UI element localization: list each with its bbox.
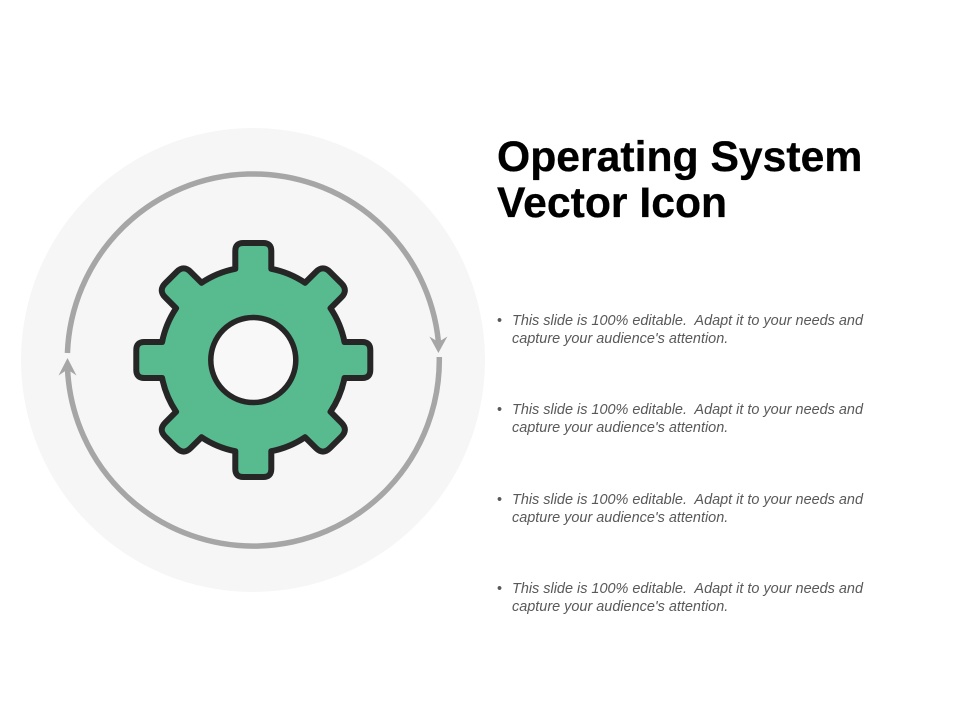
bullet text 2: This slide is 100% editable. Adapt it to your needs and capture your audience's attention.	[512, 402, 863, 436]
bullet text 1: This slide is 100% editable. Adapt it to your needs and capture your audience's attention.	[512, 313, 863, 347]
gear centre hole	[211, 318, 296, 402]
title	[497, 133, 862, 227]
background circle	[21, 128, 485, 592]
bullet text 3: •	[497, 492, 502, 508]
title: Operating System	[497, 133, 862, 181]
gear body	[136, 243, 370, 477]
title: Vector Icon	[497, 179, 727, 227]
icon: green gear	[136, 243, 370, 477]
arrow: upper arc clockwise	[67, 174, 447, 353]
icon graphic: gear with circular arrows	[21, 128, 485, 592]
bullet text 4: •	[497, 581, 502, 597]
arrow: lower arc clockwise	[58, 357, 439, 546]
bullet text 3: This slide is 100% editable. Adapt it to your needs and capture your audience's attention.	[512, 492, 863, 526]
bullet text 4: This slide is 100% editable. Adapt it to your needs and capture your audience's attention.	[512, 581, 863, 615]
bullet text 2: •	[497, 402, 502, 418]
bullet text 1: •	[497, 313, 502, 329]
